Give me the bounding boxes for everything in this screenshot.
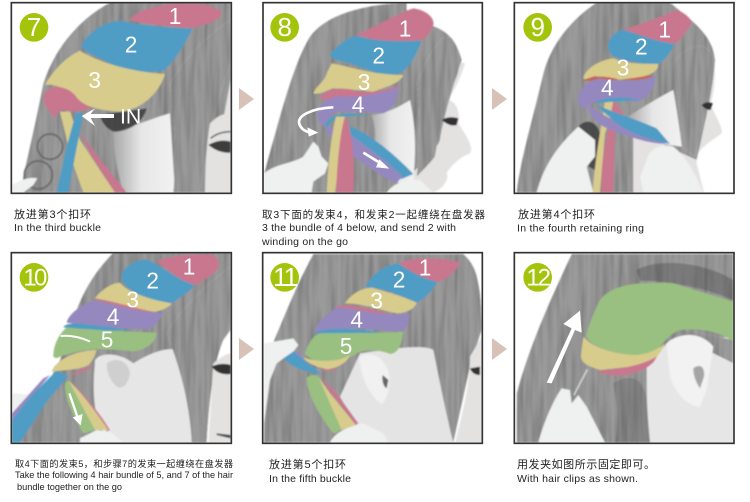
step badge 7 — [20, 12, 48, 42]
section numbers: 2 — [125, 31, 137, 57]
yellow strand — [327, 117, 345, 193]
arrow: IN — [82, 104, 141, 128]
blue arm — [283, 352, 322, 374]
arrow: 7 to 8 — [239, 88, 254, 110]
panel: step 12 — [514, 253, 734, 443]
hair section 3 — [583, 58, 658, 80]
caption: step 9: In the fourth retaining ring — [517, 222, 644, 234]
hair section 4 — [315, 307, 409, 332]
lower blue strand — [350, 126, 413, 179]
ear — [667, 335, 713, 407]
section numbers: 2 — [635, 34, 648, 60]
hair clip — [574, 369, 587, 395]
section numbers: 1 — [419, 254, 431, 280]
hair section 5 — [305, 332, 403, 363]
pink loop — [43, 87, 93, 118]
lower strand pink — [320, 376, 358, 425]
caption: step 10: bundle together on the go — [17, 482, 122, 492]
section numbers: 3 — [617, 54, 629, 80]
section numbers: 4 — [352, 91, 364, 117]
section numbers: 2 — [372, 42, 385, 68]
yellow section — [581, 337, 665, 370]
left hand — [264, 338, 298, 423]
hair section 2 — [121, 259, 195, 303]
step badge 8: 8 — [277, 12, 292, 42]
hair section 3 — [313, 63, 403, 94]
panel: step 11 — [263, 253, 482, 443]
blue band — [593, 98, 640, 103]
caption: step 11 — [269, 457, 351, 485]
blue arm — [12, 371, 68, 443]
step badge 11: 11 — [273, 262, 298, 292]
lower strand green — [307, 375, 342, 433]
caption: step 12: With hair clips as shown. — [517, 473, 638, 485]
pink strand — [336, 116, 354, 193]
arrow: 11 to 12 — [492, 338, 507, 360]
hand — [264, 142, 328, 193]
panel: step 10 — [11, 253, 231, 443]
arrow: 10 to 11 — [239, 338, 254, 360]
hair section 4 — [67, 301, 163, 329]
section numbers: 4 — [601, 74, 614, 100]
purple arm — [12, 375, 50, 420]
pink section — [597, 357, 657, 376]
top dark hair — [637, 263, 733, 300]
yellow lower — [303, 355, 350, 369]
section numbers: 1 — [183, 254, 195, 280]
section numbers: 2 — [146, 267, 159, 293]
hand — [538, 388, 605, 443]
arrow: curved white — [299, 107, 333, 137]
section numbers: 5 — [101, 326, 113, 352]
green section — [586, 283, 733, 356]
lower strand yellow — [68, 381, 108, 430]
blue band — [325, 113, 372, 128]
step badge 12: 12 — [526, 264, 551, 291]
dark bun hair — [613, 378, 650, 443]
section numbers — [601, 16, 671, 100]
caption: step 8 — [261, 208, 486, 248]
caption: step 10 — [15, 458, 233, 492]
caption: step 7: 放进第3个扣环 — [14, 207, 91, 221]
step badge 9: 9 — [530, 12, 545, 42]
pink lower — [68, 365, 93, 375]
lower blue strand — [597, 105, 670, 144]
section numbers: 3 — [358, 69, 370, 95]
caption: step 9: 放进第4个扣环 — [518, 207, 595, 221]
lower strand yellow — [317, 377, 356, 430]
section numbers: 5 — [340, 333, 352, 359]
skin — [647, 337, 733, 443]
hair section 1 — [398, 258, 461, 282]
hair section 4 — [318, 87, 398, 127]
panel: step 8 — [263, 3, 482, 193]
step badge 7: 7 — [27, 12, 41, 42]
caption: step 8: winding on the go — [261, 236, 348, 248]
section numbers — [101, 254, 195, 352]
caption: step 12 — [517, 457, 655, 485]
lower purple strand — [326, 127, 403, 183]
caption: step 8: 取3下面的发束4，和发束2一起缠绕在盘发器 — [262, 208, 486, 221]
hair section 3 — [95, 283, 172, 312]
lower hand — [330, 423, 388, 443]
caption: step 9 — [517, 207, 644, 234]
hair section 5 — [53, 327, 157, 358]
section numbers: 3 — [88, 67, 101, 93]
lower strand pink — [70, 380, 110, 432]
blue strip — [313, 329, 383, 333]
section numbers: 3 — [126, 286, 139, 312]
arrow: straight white — [363, 153, 389, 169]
right hand — [640, 145, 703, 193]
step badge 8 — [270, 12, 299, 42]
blue strip — [63, 324, 133, 331]
yellow lower — [52, 350, 97, 372]
hair section 2 — [365, 263, 437, 303]
step badge 10: 10 — [23, 264, 47, 291]
caption: step 7: In the third buckle — [14, 222, 101, 234]
skin and ear — [333, 347, 453, 443]
caption: step 11: 放进第5个扣环 — [269, 457, 346, 471]
hair section 1 — [355, 8, 434, 42]
caption: step 10: Take the following 4 hair bundle of 5, and 7 of the hair — [15, 470, 233, 480]
pink strip — [336, 305, 397, 316]
yellow strand — [593, 102, 613, 193]
section numbers: 4 — [107, 303, 119, 329]
pink line — [583, 75, 653, 81]
hair section 1 — [129, 3, 222, 28]
section numbers — [88, 3, 181, 93]
section numbers: 4 — [350, 306, 363, 332]
caption: step 8: 3 the bundle of 4 below, and send 2 with — [262, 222, 456, 234]
pink strand — [80, 132, 127, 193]
hand — [12, 394, 28, 412]
hair section 3 — [345, 288, 417, 313]
section numbers: 2 — [393, 266, 405, 292]
section numbers: 1 — [169, 3, 181, 29]
section numbers — [340, 254, 431, 359]
caption: step 7 — [14, 207, 101, 234]
step badge 9 — [523, 12, 552, 42]
pink strip — [93, 299, 157, 314]
panel: step 9 — [514, 3, 734, 193]
section numbers — [352, 16, 411, 117]
arrow: curved stroke — [61, 336, 90, 342]
skin and ear — [94, 349, 200, 443]
hair section 1 — [623, 10, 692, 44]
lower strand green — [65, 381, 95, 433]
hair section 2 — [81, 21, 193, 72]
pink strip — [320, 86, 398, 100]
panel: step 7 — [11, 3, 231, 193]
hair section 4 — [578, 76, 655, 108]
caption: step 11: In the fifth buckle — [269, 473, 351, 485]
section numbers: 1 — [399, 16, 411, 42]
arrow: IN: IN — [120, 104, 141, 128]
pink strand — [601, 100, 623, 193]
blue strand — [57, 113, 83, 193]
left hand — [537, 127, 595, 193]
arrow: straight white — [69, 393, 83, 425]
caption: step 10: 取4下面的发束5，和步骤7的发束一起缠绕在盘发器 — [15, 458, 233, 469]
hair section 3 — [45, 51, 165, 112]
hair section 2 — [608, 30, 675, 64]
section numbers: 3 — [370, 287, 383, 313]
hair section 1 — [157, 254, 219, 285]
hair section 2 — [329, 36, 422, 75]
yellow strand — [60, 112, 115, 193]
arrow: upward white — [547, 311, 582, 383]
lower purple strand — [588, 105, 667, 144]
section numbers: 1 — [658, 16, 671, 42]
purple arm — [292, 352, 305, 360]
arrow: 8 to 9 — [492, 88, 507, 110]
pink lower — [318, 365, 342, 371]
caption: step 12: 用发夹如图所示固定即可。 — [517, 457, 655, 471]
